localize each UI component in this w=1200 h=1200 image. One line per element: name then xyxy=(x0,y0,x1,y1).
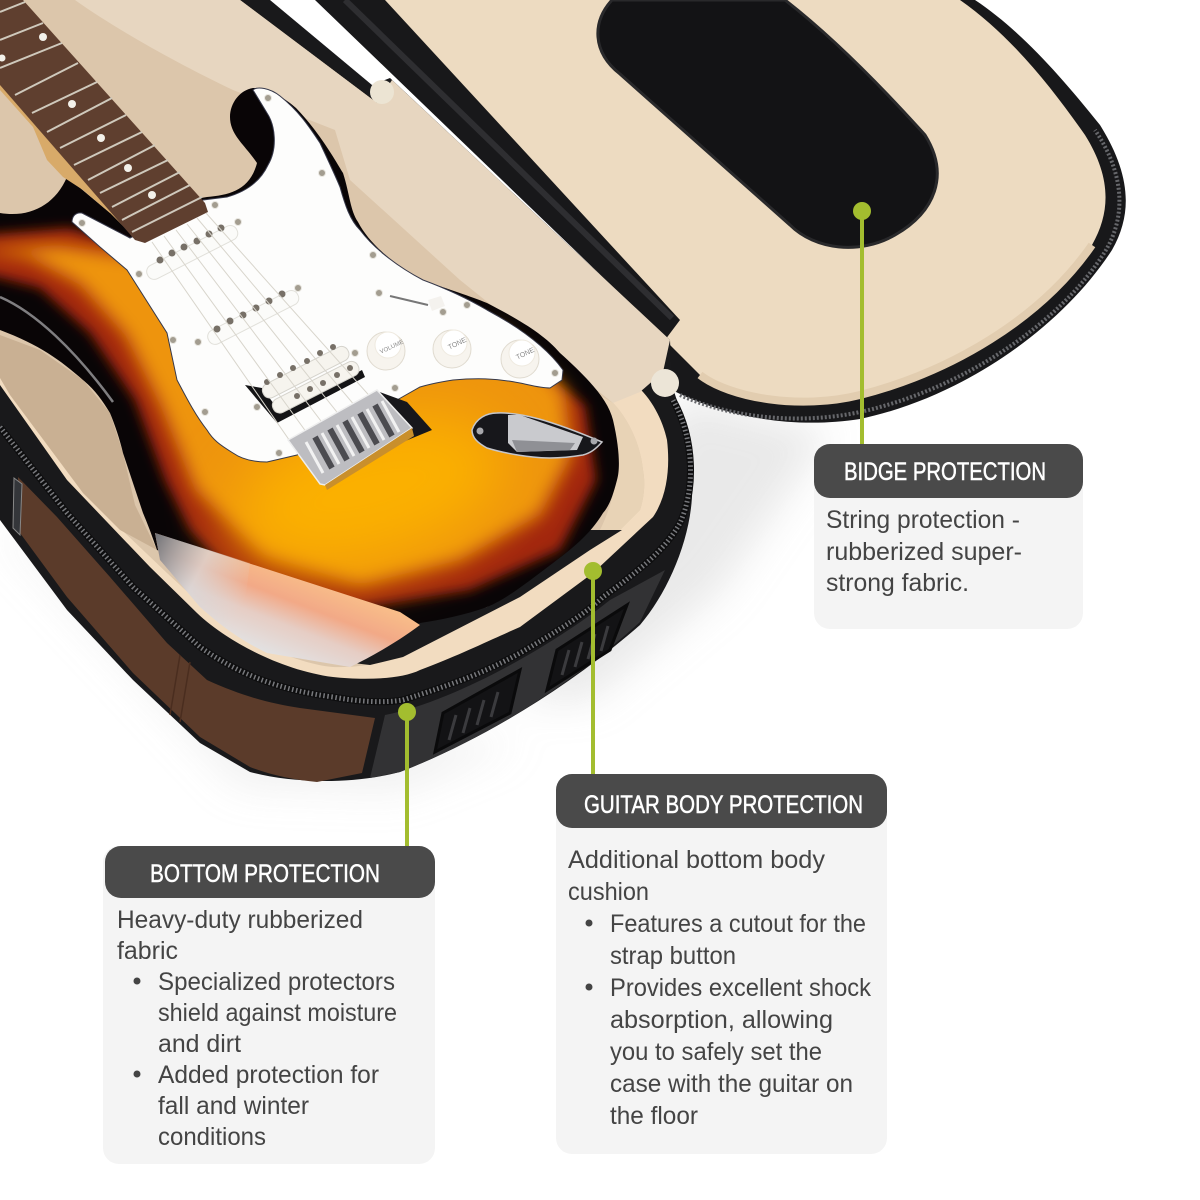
sunburst xyxy=(0,228,596,610)
body text: fall and winter xyxy=(158,1092,309,1120)
body text: shield against moisture xyxy=(158,999,397,1027)
strings xyxy=(152,213,400,470)
case lid xyxy=(315,0,1126,423)
body text: Heavy-duty rubberized xyxy=(117,906,363,934)
side rubber vent 1 xyxy=(435,670,520,752)
ground shadow xyxy=(0,395,830,790)
bridge protection pad xyxy=(598,0,937,247)
black cushion strip xyxy=(353,530,622,665)
lid zipper xyxy=(680,130,1119,418)
jack plate xyxy=(472,413,602,458)
heading: BOTTOM PROTECTION xyxy=(150,860,380,888)
zipper edge xyxy=(0,400,690,702)
heading: GUITAR BODY PROTECTION xyxy=(584,791,863,819)
panel: bottom protection xyxy=(103,846,435,1164)
pickguard xyxy=(72,88,563,462)
body highlight xyxy=(0,297,113,402)
knobs: TONE xyxy=(515,347,536,361)
body text xyxy=(568,846,871,1130)
body text: Added protection for xyxy=(158,1061,379,1089)
case base xyxy=(0,0,692,782)
body text: strap button xyxy=(610,942,736,970)
body text: and dirt xyxy=(158,1030,241,1058)
body text xyxy=(826,506,1022,597)
knobs: VOLUME xyxy=(379,339,405,356)
body text: String protection - xyxy=(826,506,1020,534)
body text: Features a cutout for the xyxy=(610,910,866,938)
maple neck xyxy=(0,83,135,238)
heading: BIDGE PROTECTION xyxy=(844,458,1046,486)
body text: you to safely set the xyxy=(610,1038,822,1066)
protective film xyxy=(155,533,420,667)
knobs: TONE xyxy=(447,337,468,351)
body text: fabric xyxy=(117,937,178,965)
body text: Provides excellent shock xyxy=(610,974,871,1002)
pointer lines xyxy=(398,202,871,848)
right inner wall xyxy=(600,395,644,530)
body text: strong fabric. xyxy=(826,569,969,597)
cream rim xyxy=(0,0,668,679)
body text: cushion xyxy=(568,878,649,906)
body text: rubberized super- xyxy=(826,538,1022,566)
body text: conditions xyxy=(158,1123,266,1151)
guitar body xyxy=(0,88,619,635)
side panel grey xyxy=(370,570,665,778)
body text: Specialized protectors xyxy=(158,968,395,996)
screws xyxy=(78,94,558,456)
guitar xyxy=(0,0,619,667)
fretboard xyxy=(0,0,208,243)
body text: case with the guitar on xyxy=(610,1070,853,1098)
tag xyxy=(13,478,22,535)
zip pulls xyxy=(370,80,394,104)
panel: bridge protection xyxy=(814,444,1083,629)
panel: guitar body protection xyxy=(556,774,887,1154)
body text: absorption, allowing xyxy=(610,1006,833,1034)
brown panel xyxy=(18,477,375,782)
bridge xyxy=(288,390,432,490)
knobs xyxy=(367,330,539,378)
body text: Additional bottom body xyxy=(568,846,825,874)
body text xyxy=(117,906,397,1151)
side rubber vent 2 xyxy=(547,605,627,690)
body text: the floor xyxy=(610,1102,698,1130)
upper cushion wall xyxy=(75,0,670,403)
pickups xyxy=(144,223,365,423)
selector switch xyxy=(390,296,445,311)
beige interior xyxy=(0,0,644,667)
lower left cavity xyxy=(0,335,157,550)
